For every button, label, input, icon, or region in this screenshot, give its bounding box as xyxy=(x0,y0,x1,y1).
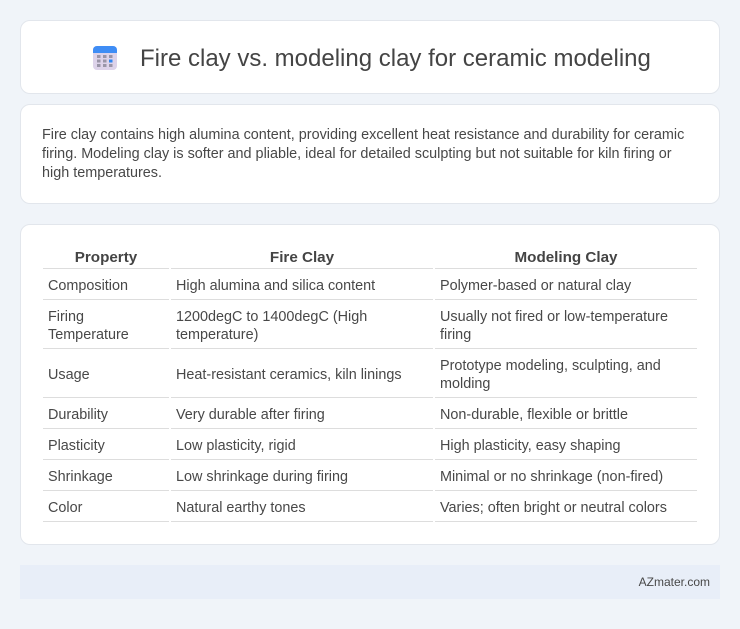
row: firing temperature: Firing xyxy=(48,309,84,325)
row: plasticity: Plasticity xyxy=(48,438,105,454)
footer bar xyxy=(20,565,720,599)
panel: summary text xyxy=(20,104,720,204)
row: durability: Very durable after firing xyxy=(176,407,325,423)
table header row: Property xyxy=(75,249,137,266)
panel: comparison table xyxy=(20,224,720,545)
row: firing temperature: temperature) xyxy=(176,327,258,343)
row: plasticity: Low plasticity, rigid xyxy=(176,438,296,454)
title card xyxy=(20,20,720,94)
row: firing temperature: Temperature xyxy=(48,327,129,343)
row: plasticity: High plasticity, easy shaping xyxy=(440,438,621,454)
row: firing temperature: 1200degC to 1400degC (High xyxy=(176,309,367,325)
row: shrinkage: Minimal or no shrinkage (non-fired) xyxy=(440,469,663,485)
row: plasticity xyxy=(48,438,621,454)
row: composition: Polymer-based or natural clay xyxy=(440,278,631,294)
icon: calendar xyxy=(93,46,117,70)
row: durability: Non-durable, flexible or brittle xyxy=(440,407,628,423)
row: usage: Heat-resistant ceramics, kiln linings xyxy=(176,367,402,383)
row: firing temperature: firing xyxy=(440,327,471,343)
summary paragraph: Fire clay contains high alumina content, providing excellent heat resistance and durability for ceramic xyxy=(42,126,684,142)
row: shrinkage xyxy=(48,469,663,485)
row: composition: Composition xyxy=(48,278,128,294)
row: usage xyxy=(48,358,661,392)
row: composition: High alumina and silica content xyxy=(176,278,375,294)
comparison table xyxy=(43,249,697,522)
title: Fire clay vs. modeling clay for ceramic modeling xyxy=(140,45,651,72)
table header row: Fire Clay xyxy=(270,249,334,266)
row: color: Color xyxy=(48,500,82,516)
summary paragraph: high temperatures. xyxy=(42,165,162,181)
row: durability xyxy=(48,407,628,423)
table header row: Modeling Clay xyxy=(515,249,617,266)
row: firing temperature: Usually not fired or low-temperature xyxy=(440,309,668,325)
row: usage: Prototype modeling, sculpting, and xyxy=(440,358,661,374)
row: usage: molding xyxy=(440,376,490,392)
row: firing temperature xyxy=(48,309,668,343)
summary paragraph: firing. Modeling clay is softer and pliable, ideal for detailed sculpting but not suitable for kiln firing or xyxy=(42,146,672,162)
row: color: Natural earthy tones xyxy=(176,500,306,516)
summary paragraph xyxy=(42,126,684,181)
row: durability: Durability xyxy=(48,407,108,423)
row: color xyxy=(48,500,667,516)
row: color: Varies; often bright or neutral colors xyxy=(440,500,667,516)
row: shrinkage: Shrinkage xyxy=(48,469,113,485)
table header row xyxy=(75,249,618,266)
row: shrinkage: Low shrinkage during firing xyxy=(176,469,348,485)
row: usage: Usage xyxy=(48,367,90,383)
footer credit: AZmater.com xyxy=(639,575,710,589)
row: composition xyxy=(48,278,632,294)
